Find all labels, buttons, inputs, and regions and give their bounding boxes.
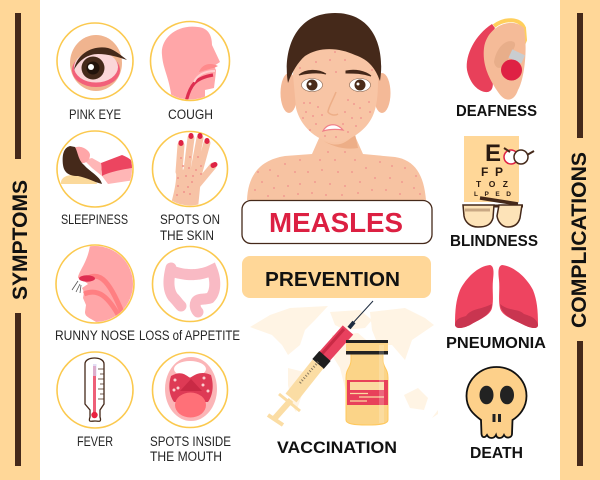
illustration: syringe xyxy=(268,301,373,425)
panel: complications side band: COMPLICATIONS xyxy=(568,152,591,328)
illustration: patient with measles rash xyxy=(247,13,426,200)
icon: skull xyxy=(466,367,526,438)
icon: cough xyxy=(150,22,230,102)
icon: spots inside the mouth xyxy=(152,352,228,428)
label: blindness: BLINDNESS xyxy=(450,233,538,250)
label: sleepiness: SLEEPINESS xyxy=(61,212,128,227)
icon: eye chart and glasses: E xyxy=(485,140,501,167)
title: measles: MEASLES xyxy=(269,207,403,238)
heading: prevention: PREVENTION xyxy=(265,269,400,291)
label: spots inside the mouth: THE MOUTH xyxy=(150,449,222,464)
label: spots on the skin xyxy=(160,212,220,243)
icon: spots on the hand xyxy=(152,132,228,208)
icon: sleepiness xyxy=(57,131,135,207)
icon: pink eye xyxy=(57,23,133,99)
icon: eye chart and glasses xyxy=(463,136,534,227)
label: spots inside the mouth: SPOTS INSIDE xyxy=(150,434,231,449)
icon: thermometer xyxy=(57,352,133,428)
icon: lungs xyxy=(455,265,538,328)
icon: eye chart and glasses: T O Z xyxy=(476,179,508,189)
label: pink eye: PINK EYE xyxy=(69,107,121,122)
label: spots inside the mouth xyxy=(150,434,231,464)
label: pneumonia: PNEUMONIA xyxy=(446,335,546,352)
rash spots xyxy=(255,52,420,196)
label: fever: FEVER xyxy=(77,434,113,449)
label: deafness: DEAFNESS xyxy=(456,103,537,120)
icon: runny nose xyxy=(56,245,135,325)
icon: eye chart and glasses: L P E D xyxy=(474,191,511,198)
title: measles xyxy=(242,200,432,244)
icon: ear with hearing aid xyxy=(467,20,526,100)
label: spots on the skin: SPOTS ON xyxy=(160,212,220,227)
panel: complications side band xyxy=(560,0,600,480)
label: runny nose: RUNNY NOSE xyxy=(55,328,135,343)
label: death: DEATH xyxy=(470,445,523,462)
panel: symptoms side band: SYMPTOMS xyxy=(9,180,32,300)
heading: prevention xyxy=(242,256,431,298)
label: cough: COUGH xyxy=(168,107,213,122)
icon: eye chart and glasses: F P xyxy=(481,165,503,179)
icon: colon xyxy=(152,246,228,322)
illustration: world map background xyxy=(250,306,438,418)
illustration: vaccine vial xyxy=(346,340,388,425)
label: spots on the skin: THE SKIN xyxy=(160,228,214,243)
label: vaccination: VACCINATION xyxy=(277,438,397,457)
panel: symptoms side band xyxy=(0,0,40,480)
label: loss of appetite: LOSS of APPETITE xyxy=(139,328,240,343)
